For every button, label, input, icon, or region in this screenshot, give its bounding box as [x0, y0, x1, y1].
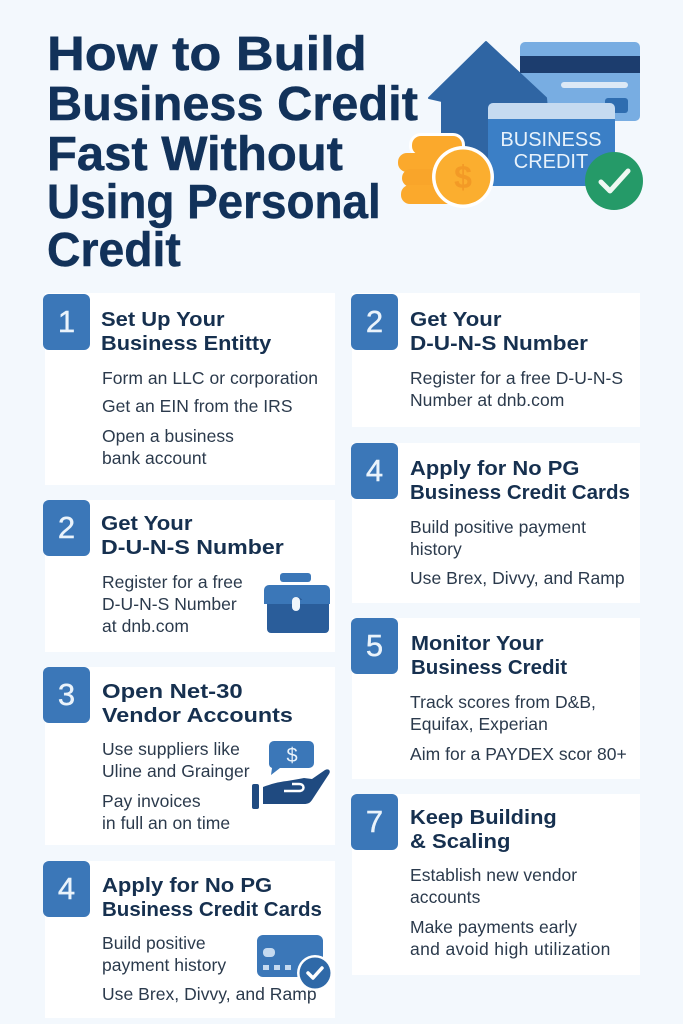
icon: green check badge [585, 152, 643, 210]
text [102, 933, 317, 1004]
list [102, 368, 318, 468]
heading: Keep Building [410, 806, 557, 829]
heading: Business Credit Cards [410, 481, 630, 504]
number badge 2: 2 [366, 304, 383, 339]
heading: Vendor Accounts [102, 704, 293, 727]
list: Open a business [102, 426, 234, 446]
panel: step 2 DUNS right [352, 293, 640, 427]
text: Use Brex, Divvy, and Ramp [102, 984, 317, 1004]
text: Number at dnb.com [410, 390, 564, 410]
text: history [410, 539, 462, 559]
text: D-U-N-S Number [102, 594, 237, 614]
heading [102, 874, 322, 921]
heading [411, 632, 567, 679]
icon: hand with dollar: $ [286, 745, 298, 767]
heading: Business Credit [411, 656, 567, 679]
panel: step 5 monitor [352, 618, 640, 779]
heading: & Scaling [410, 830, 510, 853]
text [410, 865, 611, 959]
title: How to Build [47, 28, 367, 81]
icon: coins [398, 136, 494, 208]
icon: card with check [257, 935, 330, 991]
number badge 5 [351, 618, 398, 674]
heading [410, 806, 557, 853]
title: Business Credit [47, 78, 418, 131]
text: and avoid high utilization [410, 939, 611, 959]
panel: step 3 net-30 [45, 667, 335, 845]
icon: business credit card: CREDIT [514, 151, 588, 173]
heading: Open Net-30 [102, 680, 243, 703]
panel: step 1 set up entity [45, 293, 335, 485]
number badge 4 [43, 861, 90, 917]
text: Use Brex, Divvy, and Ramp [410, 568, 625, 588]
text [410, 692, 627, 764]
heading: Apply for No PG [410, 457, 579, 480]
text: Establish new vendor [410, 865, 577, 885]
list: bank account [102, 448, 207, 468]
icon: business credit card [488, 103, 615, 186]
text: Track scores from D&B, [410, 692, 596, 712]
heading: D-U-N-S Number [101, 536, 284, 559]
heading: Monitor Your [411, 632, 544, 655]
icon: credit card back [520, 42, 640, 121]
list: Get an EIN from the IRS [102, 396, 293, 416]
heading: D-U-N-S Number [410, 332, 588, 355]
text [410, 517, 625, 588]
heading [101, 512, 284, 559]
list: Form an LLC or corporation [102, 368, 318, 388]
text: Uline and Grainger [102, 761, 250, 781]
text: accounts [410, 887, 480, 907]
heading: Business Entitty [101, 332, 271, 355]
number badge 2 [43, 500, 90, 556]
icon: briefcase [264, 573, 330, 633]
title [47, 28, 418, 277]
text: Register for a free D-U-N-S [410, 368, 623, 388]
heading [101, 308, 271, 355]
number badge 3: 3 [58, 677, 75, 712]
number badge 7 [351, 794, 398, 850]
text: payment history [102, 955, 226, 975]
number badge 5: 5 [366, 628, 383, 663]
number badge 1: 1 [58, 304, 75, 339]
text: in full an on time [102, 813, 230, 833]
panel: step 4 no PG cards left [45, 861, 335, 1018]
panel: step 4 no PG right [352, 443, 640, 603]
number badge 4: 4 [366, 453, 383, 488]
heading: Get Your [410, 308, 501, 331]
number badge 1 [43, 294, 90, 350]
number badge 4: 4 [58, 871, 75, 906]
text: Use suppliers like [102, 739, 240, 759]
icon: coins: $ [454, 159, 472, 195]
heading: Apply for No PG [102, 874, 272, 897]
text: Aim for a PAYDEX scor 80+ [410, 744, 627, 764]
heading: Get Your [101, 512, 192, 535]
text: Register for a free [102, 572, 243, 592]
heading [102, 680, 293, 727]
text: Build positive [102, 933, 206, 953]
icon: house [429, 42, 548, 170]
number badge 7: 7 [366, 804, 383, 839]
title: Credit [47, 224, 181, 277]
panel: step 7 keep building [352, 794, 640, 975]
text: Make payments early [410, 917, 577, 937]
title: Fast Without [47, 128, 343, 181]
number badge 4 [351, 443, 398, 499]
number badge 2: 2 [58, 510, 75, 545]
text [102, 739, 250, 833]
hero illustration: house, cards, coins, check [398, 41, 643, 210]
text [102, 572, 243, 636]
text: Equifax, Experian [410, 714, 548, 734]
title: Using Personal [47, 176, 381, 229]
heading [410, 308, 588, 355]
text [410, 368, 623, 410]
text: at dnb.com [102, 616, 189, 636]
number badge 3 [43, 667, 90, 723]
heading: Set Up Your [101, 308, 225, 331]
icon: hand with dollar [252, 741, 330, 809]
panel: step 2 DUNS left [45, 500, 335, 652]
number badge 2 [351, 294, 398, 350]
text: Pay invoices [102, 791, 201, 811]
heading: Business Credit Cards [102, 898, 322, 921]
text: Build positive payment [410, 517, 586, 537]
heading [410, 457, 630, 504]
icon: business credit card: BUSINESS [500, 129, 602, 151]
